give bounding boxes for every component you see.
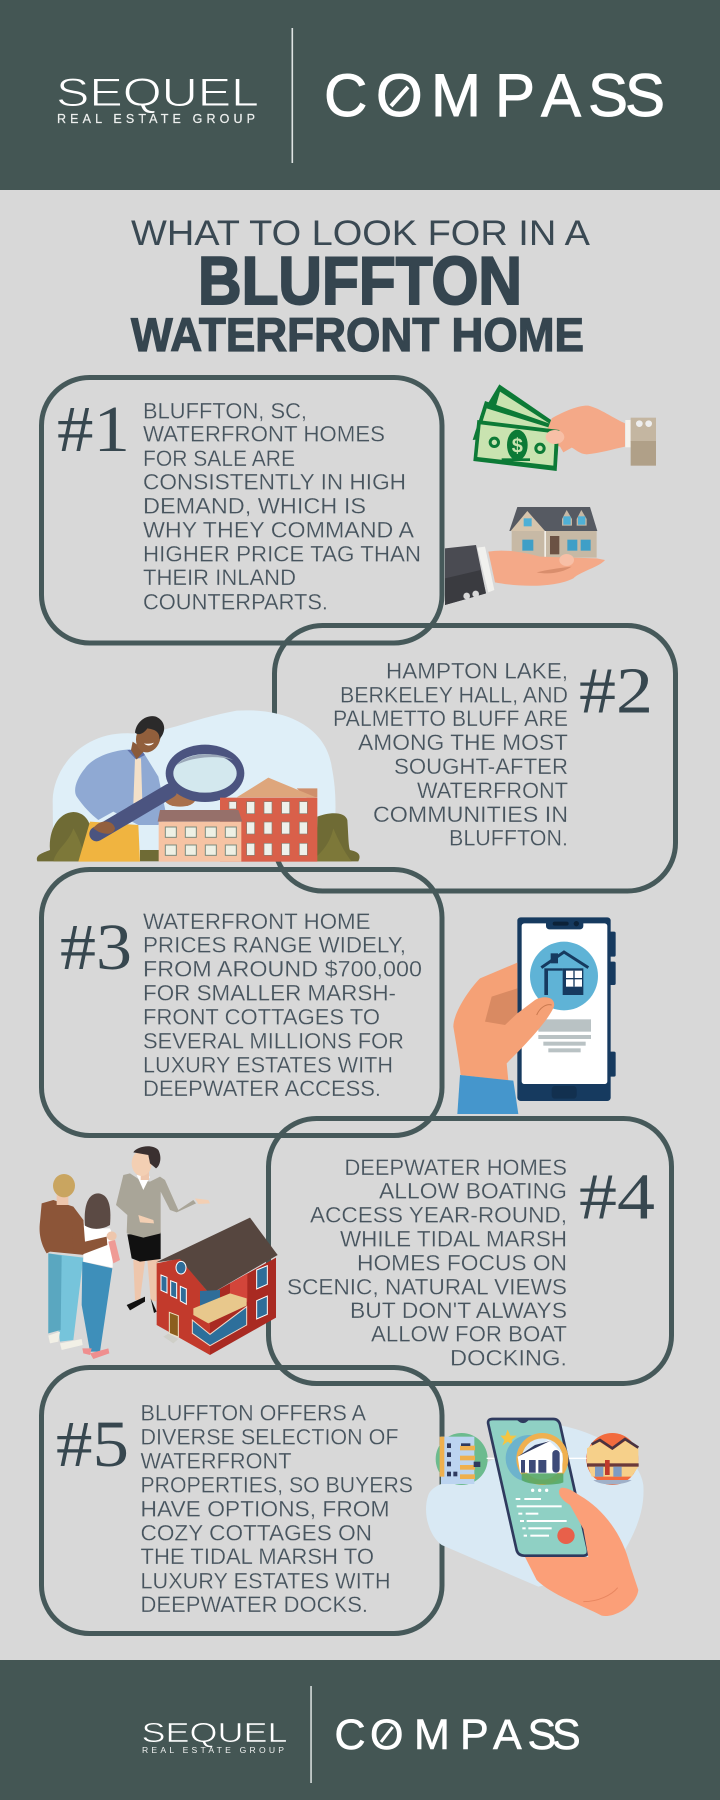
text block 1: FOR SALE ARE — [143, 446, 295, 471]
number 2: #2 — [579, 655, 653, 728]
number 1: #1 — [57, 393, 130, 466]
text block 2: COMMUNITIES IN — [373, 802, 568, 827]
icon: hand holding house — [445, 507, 605, 605]
title: BLUFFTON — [198, 243, 522, 319]
phone — [517, 917, 616, 1101]
footer logo: Sequel Real Estate Group — [142, 1717, 288, 1755]
text block 5: PROPERTIES, SO BUYERS — [140, 1472, 413, 1497]
text block 5: DIVERSE SELECTION OF — [140, 1425, 398, 1450]
text block 5: COZY COTTAGES ON — [140, 1520, 372, 1545]
man — [75, 716, 195, 862]
illustration: man with magnifying glass over buildings — [37, 710, 360, 862]
header band with logos — [0, 0, 720, 190]
couple — [40, 1174, 120, 1359]
text block 2: HAMPTON LAKE, — [386, 658, 568, 683]
illustration: agent showing house to couple — [40, 1146, 278, 1359]
text block 4: DEEPWATER HOMES — [344, 1155, 567, 1180]
text block 1: THEIR INLAND — [143, 565, 296, 590]
text block 2 — [333, 658, 568, 851]
connector line — [487, 1458, 587, 1459]
text block 5: BLUFFTON OFFERS A — [140, 1401, 366, 1426]
illustration: money and house exchanged between hands — [445, 384, 656, 605]
text block 5: THE TIDAL MARSH TO — [140, 1544, 374, 1569]
text block 3: DEEPWATER ACCESS. — [143, 1076, 381, 1101]
logo: Sequel Real Estate Group — [56, 71, 259, 126]
house — [156, 1218, 278, 1355]
text block 3: PRICES RANGE WIDELY, — [143, 933, 406, 958]
text block 3: FRONT COTTAGES TO — [143, 1004, 380, 1029]
logo: Sequel Real Estate Group: REAL ESTATE GROUP — [57, 112, 255, 126]
number 5: #5 — [56, 1408, 129, 1481]
background blob — [426, 1426, 644, 1587]
text block 1: HIGHER PRICE TAG THAN — [143, 542, 421, 567]
text block 3: LUXURY ESTATES WITH — [143, 1052, 393, 1077]
text block 1: WHY THEY COMMAND A — [143, 518, 414, 543]
panel: fact 2 — [274, 626, 676, 891]
logo: Sequel Real Estate Group: SEQUEL — [56, 71, 259, 115]
text block 5: DEEPWATER DOCKS. — [140, 1592, 368, 1617]
title — [131, 214, 591, 361]
number 3: #3 — [60, 911, 132, 984]
icon: home in circle — [530, 942, 598, 1010]
text block 4: BUT DON'T ALWAYS — [350, 1298, 567, 1323]
text block 3: WATERFRONT HOME — [143, 909, 370, 934]
text block 2: PALMETTO BLUFF ARE — [333, 706, 568, 731]
property circle: apartments — [436, 1433, 488, 1485]
text block 2: BERKELEY HALL, AND — [340, 682, 568, 707]
text block 3: SEVERAL MILLIONS FOR — [143, 1028, 404, 1053]
footer logo: Compass: COMPASS — [334, 1711, 581, 1759]
hand — [525, 1488, 638, 1616]
text block 3: FROM AROUND $700,000 — [143, 957, 422, 982]
footer logo: Sequel Real Estate Group: SEQUEL — [142, 1717, 288, 1748]
text block 4: ALLOW FOR BOAT — [371, 1322, 567, 1347]
agent — [116, 1146, 210, 1313]
hand — [453, 963, 554, 1114]
text block 4: ALLOW BOATING — [379, 1179, 567, 1204]
text block 1: CONSISTENTLY IN HIGH — [143, 469, 406, 494]
phone — [488, 1419, 588, 1556]
text block 1: BLUFFTON, SC, — [143, 398, 307, 423]
text block 1: DEMAND, WHICH IS — [143, 493, 366, 518]
logo: Compass: COMPASS — [324, 62, 665, 129]
text block 2: WATERFRONT — [417, 778, 568, 803]
text block 4: DOCKING. — [450, 1346, 567, 1371]
text block 2: SOUGHT-AFTER — [394, 754, 568, 779]
text block 1: COUNTERPARTS. — [143, 589, 328, 614]
property circle: townhouses — [586, 1433, 639, 1485]
text block 2: BLUFFTON. — [449, 826, 568, 851]
illustration: hand holding phone with home icon — [453, 917, 616, 1114]
icon: hand holding cash: $ — [512, 435, 523, 457]
text block 2: AMONG THE MOST — [358, 730, 568, 755]
text block 1: WATERFRONT HOMES — [143, 422, 385, 447]
magnifying glass — [93, 745, 244, 834]
peach building — [158, 810, 242, 862]
footer logo: Sequel Real Estate Group: REAL ESTATE GROUP — [142, 1745, 284, 1755]
text block 5 — [140, 1401, 413, 1617]
text block 4: WHILE TIDAL MARSH — [340, 1227, 567, 1252]
footer band with logos — [0, 1660, 720, 1800]
bushes — [37, 812, 360, 861]
title: WHAT TO LOOK FOR IN A — [131, 214, 591, 253]
text block 4: ACCESS YEAR-ROUND, — [310, 1203, 567, 1228]
text block 5: WATERFRONT — [140, 1449, 292, 1474]
red building — [220, 778, 317, 862]
panel: fact 1 — [42, 378, 442, 643]
number 4: #4 — [579, 1160, 655, 1233]
background blob — [53, 710, 336, 861]
panel: fact 3 — [42, 870, 442, 1136]
text block 5: LUXURY ESTATES WITH — [140, 1568, 390, 1593]
text block 4 — [287, 1155, 567, 1371]
text block 4: HOMES FOCUS ON — [357, 1250, 567, 1275]
text block 5: HAVE OPTIONS, FROM — [140, 1496, 390, 1521]
text block 1 — [143, 398, 421, 614]
text block 4: SCENIC, NATURAL VIEWS — [287, 1274, 567, 1299]
text block 3 — [143, 909, 422, 1101]
title: WATERFRONT HOME — [131, 308, 584, 361]
text block 3: FOR SMALLER MARSH- — [143, 981, 396, 1006]
illustration: hand holding phone with property listings — [426, 1419, 644, 1616]
icon: hand holding cash — [473, 384, 656, 471]
panel: fact 5 — [42, 1368, 442, 1634]
panel: fact 4 — [268, 1118, 672, 1384]
